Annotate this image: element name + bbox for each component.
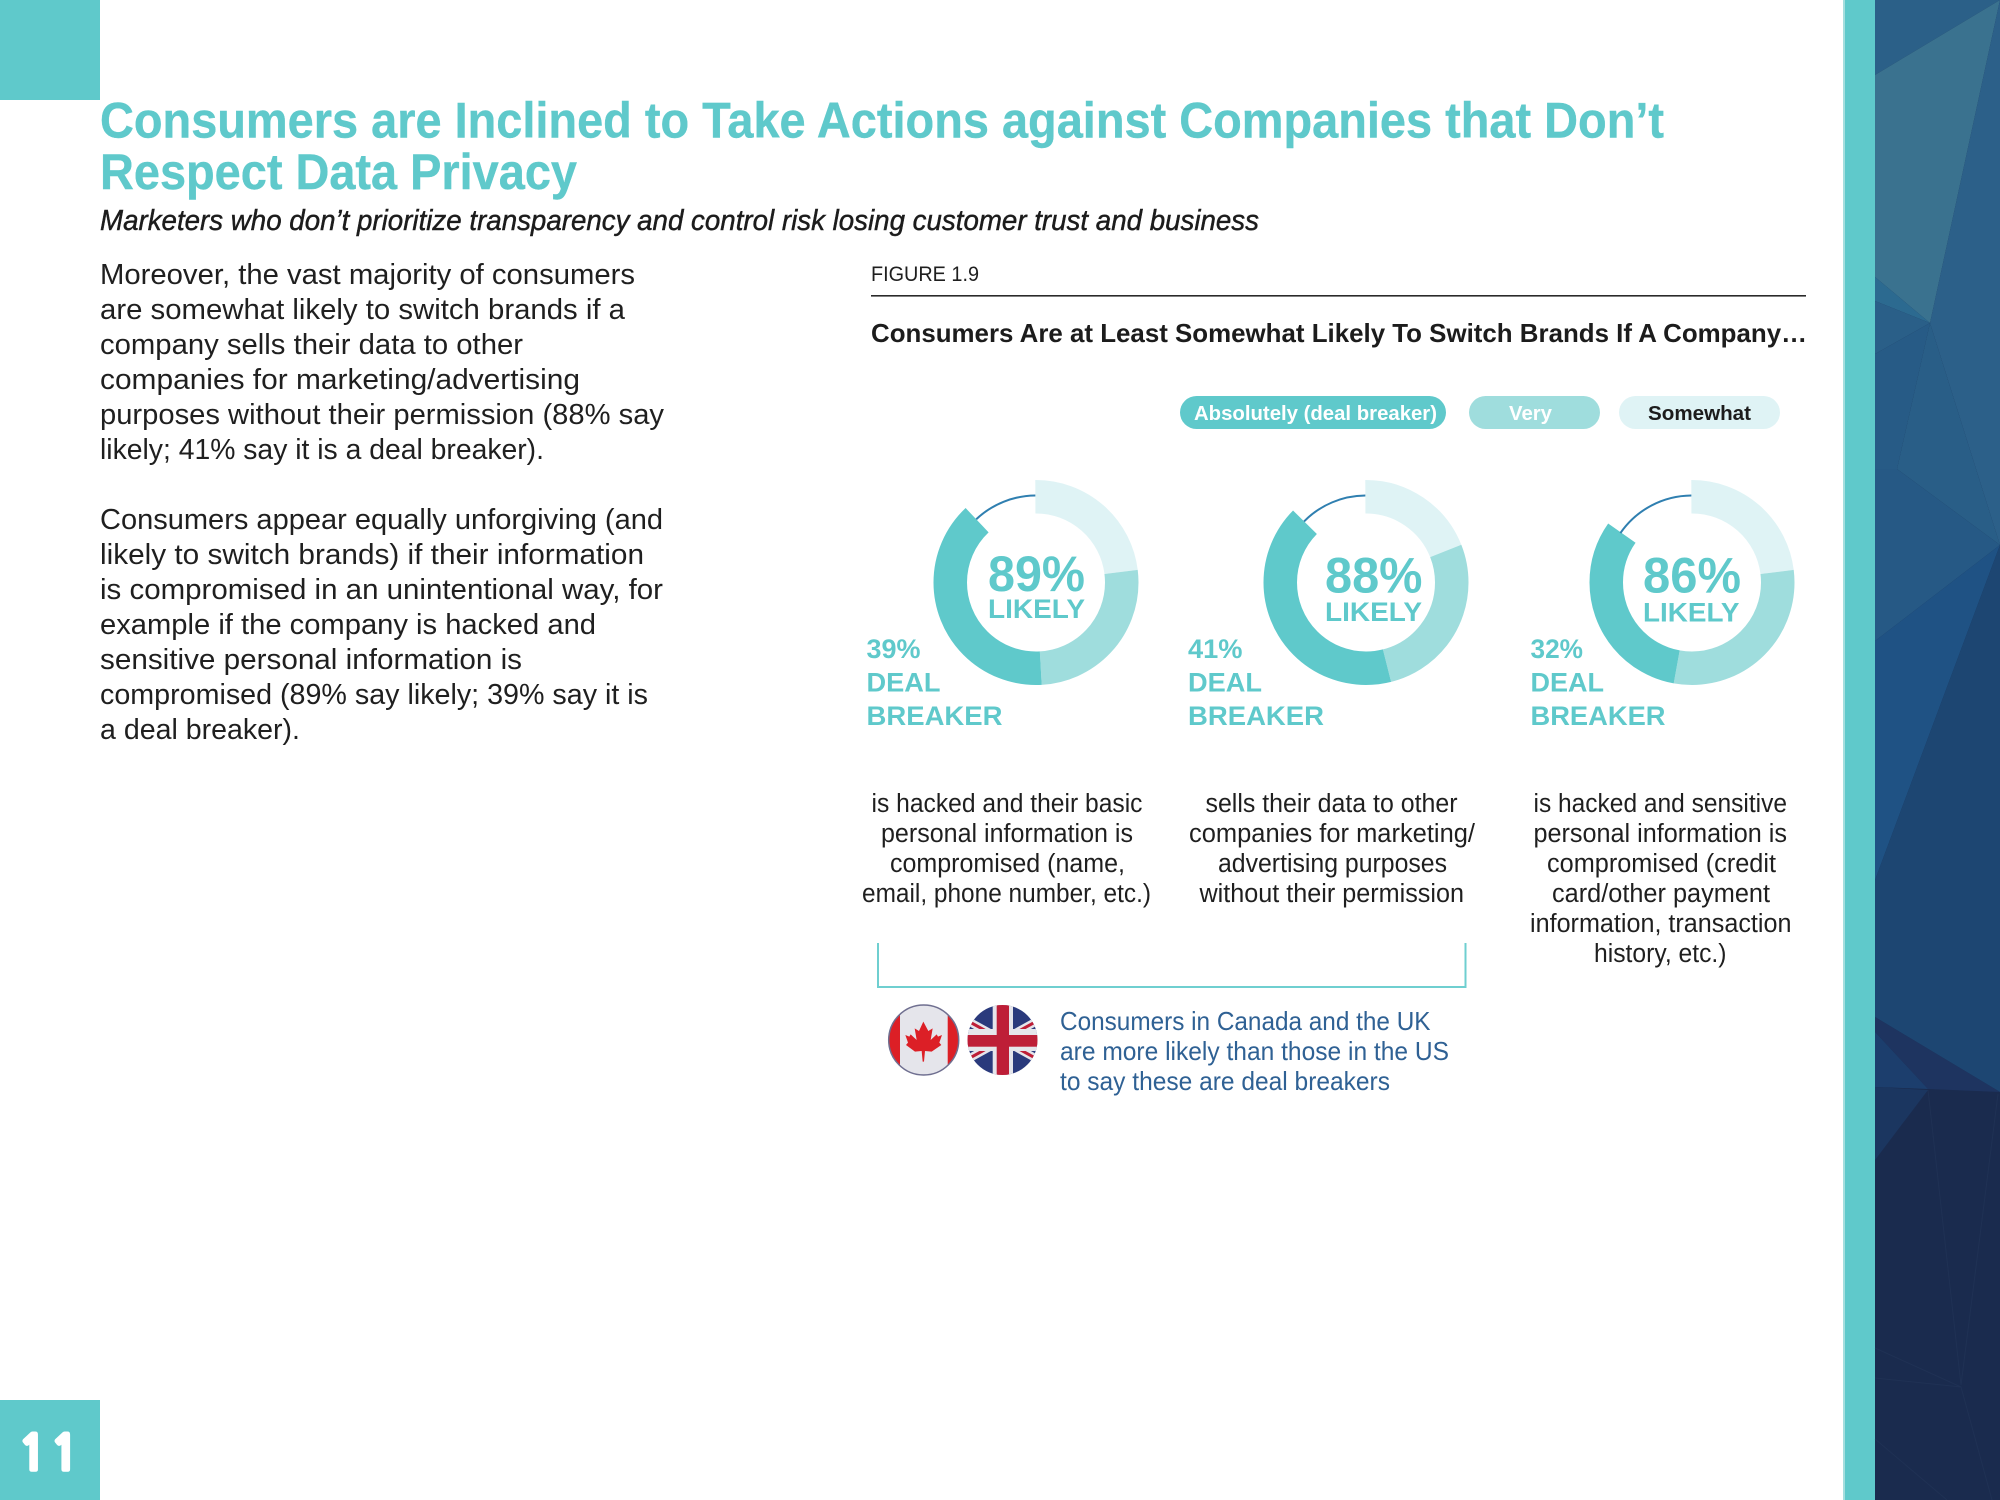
text block: unintentional compromise paragraph: sensitive personal information is — [100, 644, 522, 676]
callout: Canada and UK note: Consumers in Canada and the UK — [1060, 1006, 1431, 1036]
top-left teal square — [0, 0, 100, 100]
page number tab — [0, 1400, 100, 1500]
text block: brand switching paragraph: are somewhat likely to switch brands if a — [100, 294, 625, 326]
donut chart: 88% likely, sells data — [1188, 496, 1453, 731]
deal breaker label: 32% — [1530, 634, 1583, 664]
text block: unintentional compromise paragraph: compromised (89% say likely; 39% say it is — [100, 679, 648, 711]
description: basic information hack: is hacked and their basic — [872, 790, 1143, 818]
description: sensitive information hack: information, transaction — [1530, 910, 1792, 938]
text block: brand switching paragraph — [100, 259, 665, 466]
description: basic information hack — [862, 790, 1151, 908]
text block: unintentional compromise paragraph: Consumers appear equally unforgiving (and — [100, 504, 663, 536]
callout: Canada and UK note: to say these are deal breakers — [1060, 1066, 1390, 1096]
legend — [1180, 396, 1780, 429]
description: basic information hack: email, phone number, etc.) — [862, 880, 1151, 908]
description: sensitive information hack — [1530, 790, 1792, 968]
donut value: LIKELY — [988, 594, 1085, 624]
legend item: somewhat: Somewhat — [1648, 403, 1751, 425]
description: selling data: without their permission — [1199, 880, 1464, 908]
title — [100, 92, 1664, 200]
deal breaker label: 41% — [1188, 634, 1242, 664]
legend item: very — [1469, 396, 1600, 429]
donut value — [1325, 548, 1422, 627]
deal breaker label: 39% — [866, 634, 920, 664]
description: selling data: companies for marketing/ — [1189, 820, 1476, 848]
text block: unintentional compromise paragraph: is compromised in an unintentional way, for — [100, 574, 664, 606]
text block: unintentional compromise paragraph: likely to switch brands) if their information — [100, 539, 644, 571]
deal breaker label: DEAL — [866, 668, 940, 698]
callout: Canada and UK note: are more likely than those in the US — [1060, 1036, 1449, 1066]
donut chart: 89% likely, hacked basic information — [866, 496, 1123, 731]
description: basic information hack: compromised (name, — [890, 850, 1125, 878]
legend item: absolutely — [1180, 396, 1446, 429]
title: Respect Data Privacy — [100, 144, 577, 200]
text block: brand switching paragraph: Moreover, the vast majority of consumers — [100, 259, 635, 291]
deal breaker label: BREAKER — [866, 701, 1002, 731]
deal breaker label: DEAL — [1188, 668, 1262, 698]
bracket grouping first two charts — [878, 943, 1466, 987]
text block: brand switching paragraph: company sells their data to other — [100, 329, 524, 361]
description: sensitive information hack: compromised (credit — [1547, 850, 1776, 878]
right side band — [1843, 0, 2000, 1500]
description: sensitive information hack: personal information is — [1534, 820, 1787, 848]
description: selling data: sells their data to other — [1206, 790, 1458, 818]
donut value: 88% — [1325, 548, 1422, 604]
page number tab: 11 — [18, 1431, 82, 1478]
donut segments — [949, 496, 1123, 670]
donut value: 86% — [1643, 548, 1741, 604]
donut segments — [1605, 496, 1779, 670]
donut value: LIKELY — [1325, 597, 1422, 627]
deal breaker label — [866, 634, 1002, 731]
figure label: FIGURE 1.9 — [871, 263, 979, 286]
deal breaker label: DEAL — [1530, 668, 1604, 698]
deal breaker label: BREAKER — [1188, 701, 1324, 731]
icon: UK flag — [968, 1005, 1038, 1075]
text block: brand switching paragraph: likely; 41% say it is a deal breaker). — [100, 434, 544, 466]
chart heading: Consumers Are at Least Somewhat Likely To Switch Brands If A Company… — [871, 318, 1807, 348]
deal breaker label: BREAKER — [1530, 701, 1666, 731]
text block: unintentional compromise paragraph: a deal breaker). — [100, 714, 300, 746]
description: sensitive information hack: is hacked and sensitive — [1534, 790, 1787, 818]
legend item: absolutely: Absolutely (deal breaker) — [1194, 403, 1437, 425]
text block: unintentional compromise paragraph — [100, 504, 664, 746]
description: selling data — [1189, 790, 1476, 908]
deal breaker label — [1188, 634, 1324, 731]
callout: Canada and UK note — [1060, 1006, 1449, 1096]
text block: brand switching paragraph: purposes without their permission (88% say — [100, 399, 665, 431]
subtitle: Marketers who don’t prioritize transparency and control risk losing customer trust and business — [100, 205, 1259, 237]
icon: Canada flag — [888, 1004, 960, 1076]
legend item: somewhat — [1619, 396, 1780, 429]
description: basic information hack: personal information is — [881, 820, 1133, 848]
donut value — [1643, 548, 1741, 628]
description: sensitive information hack: history, etc.) — [1594, 940, 1726, 968]
donut segments — [1279, 496, 1453, 670]
text block: unintentional compromise paragraph: example if the company is hacked and — [100, 609, 596, 641]
donut value: 89% — [988, 546, 1085, 602]
donut chart: 86% likely, hacked sensitive information — [1530, 496, 1779, 731]
title: Consumers are Inclined to Take Actions against Companies that Don’t — [100, 92, 1664, 148]
text block: brand switching paragraph: companies for marketing/advertising — [100, 364, 580, 396]
description: selling data: advertising purposes — [1218, 850, 1447, 878]
description: sensitive information hack: card/other payment — [1552, 880, 1770, 908]
legend item: very: Very — [1509, 403, 1553, 425]
deal breaker label — [1530, 634, 1666, 731]
donut value: LIKELY — [1643, 598, 1740, 628]
